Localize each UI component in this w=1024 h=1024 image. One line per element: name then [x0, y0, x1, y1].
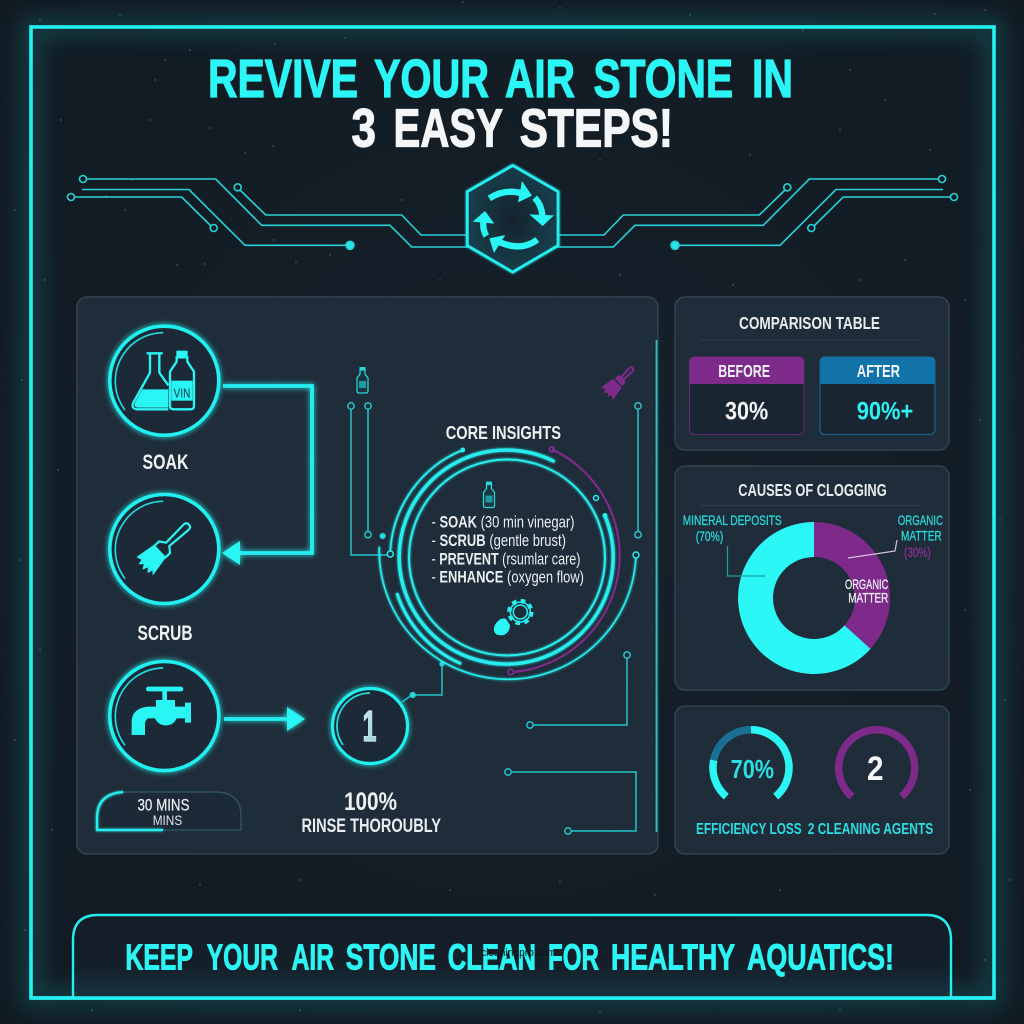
label: soak: SOAK	[142, 451, 188, 474]
title: 3	[352, 98, 376, 158]
footer banner: FOR	[548, 936, 599, 978]
panel: main process	[77, 297, 658, 854]
icon: hexagon with cycle arrows	[467, 166, 558, 272]
small purple brush icon	[600, 362, 639, 401]
text: core insights list: - SOAK (30 min vinegar)	[432, 512, 574, 531]
column: after: AFTER	[857, 361, 900, 381]
icon: result number circle	[332, 688, 408, 764]
labels	[683, 512, 943, 606]
panel: causes of clogging	[675, 466, 949, 690]
text: core insights list: - ENHANCE (oxygen flow)	[432, 568, 584, 587]
gauge: cleaning agents	[839, 730, 915, 797]
gauge labels	[696, 821, 933, 838]
title: STEPS!	[520, 98, 673, 158]
icon: bottle in core	[484, 482, 494, 508]
footer banner	[31, 915, 994, 998]
footer banner: cleaningpro.com	[481, 947, 556, 959]
footer banner: HEALTHY	[611, 936, 735, 978]
title: STONE	[594, 49, 733, 109]
title: YOUR	[374, 49, 489, 109]
labels: (70%)	[696, 528, 723, 544]
stat: 100% rinse thoroughly: 100%	[344, 788, 397, 816]
circuit lines left	[68, 176, 468, 249]
footer banner: AQUATICS!	[747, 936, 894, 978]
footer banner: STONE	[346, 936, 436, 978]
label: scrub: SCRUB	[138, 622, 192, 645]
footer banner: AIR	[292, 936, 334, 978]
arrow: soak to scrub	[222, 386, 312, 565]
footer banner: YOUR	[207, 936, 278, 978]
circuit lines right	[557, 176, 958, 249]
leader lines	[728, 540, 897, 576]
stat: 100% rinse thoroughly: RINSE THOROUBLY	[302, 816, 441, 837]
arrow: rinse to result	[224, 707, 305, 731]
donut chart	[738, 522, 890, 674]
column: after	[820, 357, 935, 434]
icon: gear and stone	[494, 601, 531, 635]
chart: core insights rings	[379, 447, 639, 679]
gauge labels: 2 CLEANING AGENTS	[808, 821, 933, 838]
column: before: BEFORE	[718, 361, 770, 381]
panel: gauges	[675, 706, 949, 854]
small bottle icon	[357, 367, 368, 393]
labels: ORGANIC	[898, 512, 943, 528]
icon: result number circle: 1	[362, 702, 376, 751]
icon: soak circle: VIN	[174, 385, 190, 400]
labels: MINERAL DEPOSITS	[683, 512, 782, 528]
title: REVIVE	[208, 49, 358, 109]
gauge labels: EFFICIENCY LOSS	[696, 821, 802, 838]
progress: 30 mins	[97, 792, 241, 830]
text: core insights list: - SCRUB (gentle brust)	[432, 531, 566, 550]
title: AIR	[505, 49, 575, 109]
panel: comparison table	[675, 297, 949, 450]
column: before	[690, 357, 804, 434]
gauge: cleaning agents: 2	[867, 750, 884, 788]
icon: soak circle	[110, 326, 219, 435]
gauge: efficiency loss: 70%	[731, 754, 774, 784]
thin circuit traces	[348, 340, 656, 834]
progress: 30 mins: MINS	[153, 813, 182, 828]
labels: MATTER	[901, 528, 942, 544]
labels: MATTER	[848, 590, 888, 606]
stat: 100% rinse thoroughly	[302, 788, 441, 837]
title: EASY	[394, 98, 503, 158]
progress: 30 mins: 30 MINS	[138, 796, 190, 814]
icon: scrub circle	[110, 494, 219, 604]
panel: causes of clogging: CAUSES OF CLOGGING	[738, 480, 887, 500]
column: before: 30%	[725, 397, 768, 425]
icon: rinse faucet circle	[110, 662, 219, 770]
title: IN	[752, 49, 793, 109]
footer banner: KEEP	[125, 936, 193, 978]
panel: comparison table: COMPARISON TABLE	[739, 313, 880, 333]
text: core insights list: - PREVENT (rsumlar care)	[432, 549, 580, 568]
labels: (30%)	[904, 544, 931, 560]
footer banner: CLEAN	[448, 936, 536, 978]
gauge: efficiency loss	[713, 730, 789, 797]
heading: core insights: CORE INSIGHTS	[446, 422, 561, 443]
title	[208, 49, 793, 158]
column: after: 90%+	[857, 397, 913, 425]
labels: ORGANIC	[845, 576, 888, 592]
text: core insights list	[432, 512, 584, 587]
